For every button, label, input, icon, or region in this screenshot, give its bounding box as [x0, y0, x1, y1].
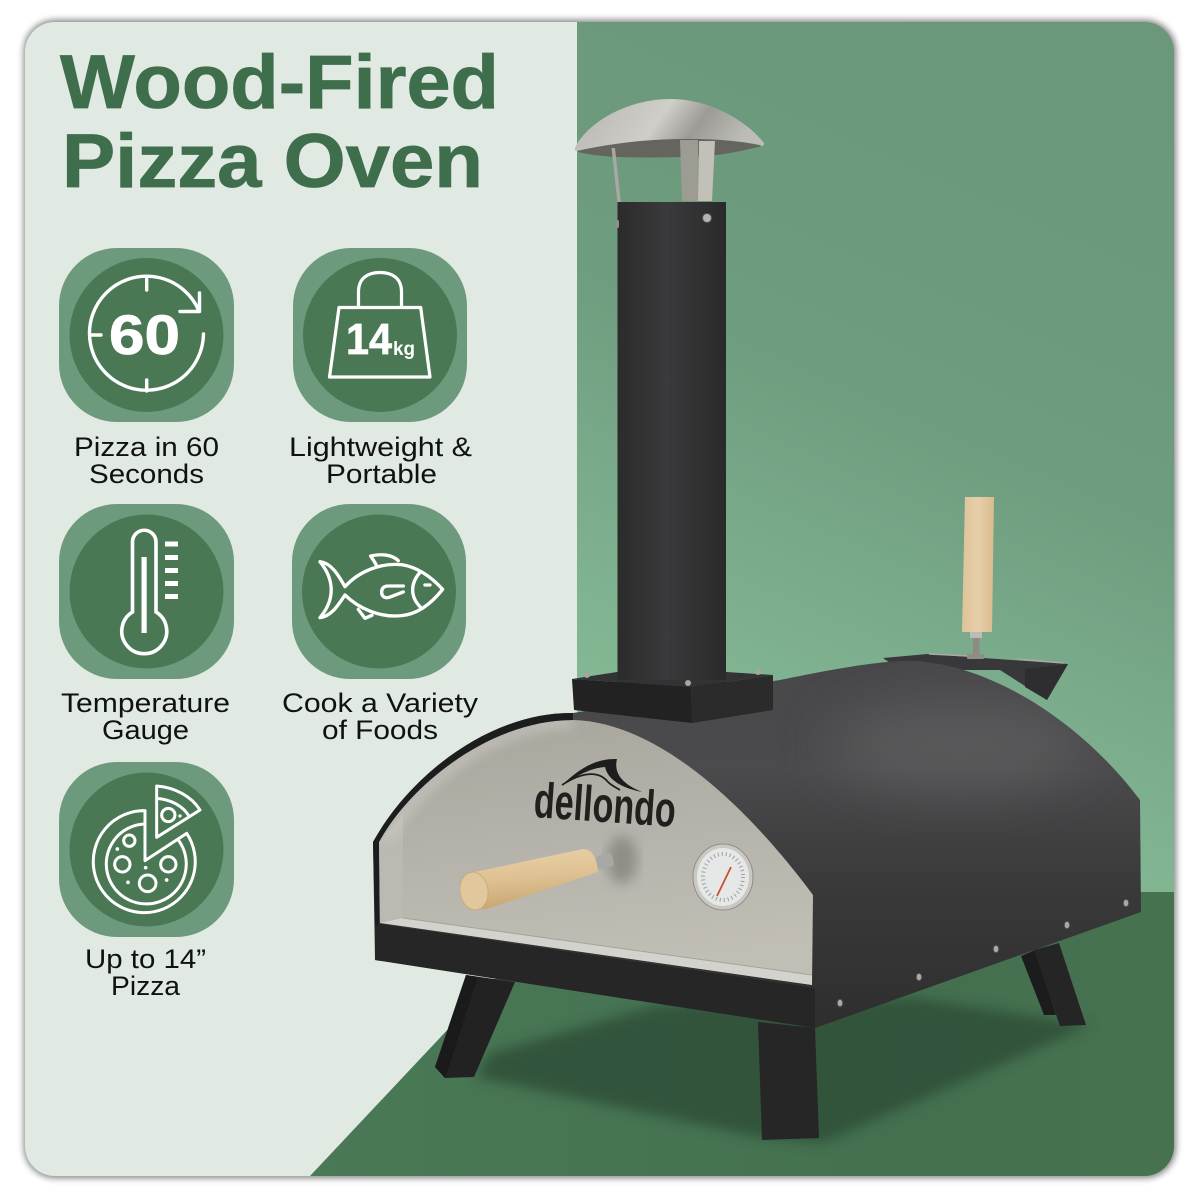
label: Cook a Variety: [282, 688, 479, 718]
title: Wood-Fired: [60, 40, 499, 125]
label: Up to 14”: [85, 944, 206, 974]
rear handle: [962, 497, 994, 659]
front bottom bar: [375, 924, 815, 1028]
oven floor shadow: [475, 998, 1091, 1143]
feature: up to 14 inch pizza: [59, 762, 234, 1001]
cap underside: [577, 139, 762, 157]
icon: 14kg weight: kg: [393, 339, 415, 360]
label: Portable: [326, 459, 437, 489]
title: [60, 40, 499, 204]
icon: 14kg weight: 14: [346, 315, 392, 364]
feature: cook a variety of foods: [282, 504, 479, 745]
panel: light left background: [25, 22, 577, 1176]
oven body: [373, 661, 1141, 1028]
feature: pizza in 60 seconds: [59, 248, 234, 489]
chimney base plate: [572, 660, 773, 723]
label: Seconds: [89, 459, 204, 489]
icon: thermometer: [59, 504, 234, 679]
back right leg: [1021, 943, 1086, 1026]
label: Temperature: [61, 688, 230, 718]
panel: green wall: [577, 22, 1175, 902]
feature: temperature gauge: [59, 504, 234, 745]
label: Gauge: [102, 715, 189, 745]
rear bracket: [883, 654, 1068, 700]
label: of Foods: [322, 715, 438, 745]
stainless door panel: [379, 720, 813, 985]
label: Pizza: [111, 971, 181, 1001]
label: Pizza in 60: [74, 432, 219, 462]
logo: dellondo: dellondo: [532, 772, 678, 838]
icon: fish: [292, 504, 466, 679]
icon: 14kg weight: [293, 248, 467, 422]
front left leg: [435, 975, 515, 1078]
front centre leg: [758, 1022, 819, 1140]
icon: pizza: [59, 762, 234, 937]
feature: lightweight and portable: [289, 248, 472, 489]
chimney cap: [575, 99, 764, 203]
icon: 60 second timer: [59, 248, 234, 422]
pizza oven: [373, 99, 1141, 1140]
panel: dark green floor: [310, 892, 1175, 1176]
side panel screws: [837, 899, 1129, 1007]
title: Pizza Oven: [62, 119, 483, 204]
chimney pipe: [616, 202, 726, 692]
cap dome: [575, 99, 764, 151]
temperature gauge dial: [693, 844, 753, 910]
left black rim: [373, 713, 573, 927]
icon: 60 second timer: 60: [109, 303, 180, 366]
label: Lightweight &: [289, 432, 472, 462]
logo: dellondo: [532, 759, 678, 838]
front wooden handle: [457, 849, 614, 912]
body highlight: [851, 702, 1069, 790]
